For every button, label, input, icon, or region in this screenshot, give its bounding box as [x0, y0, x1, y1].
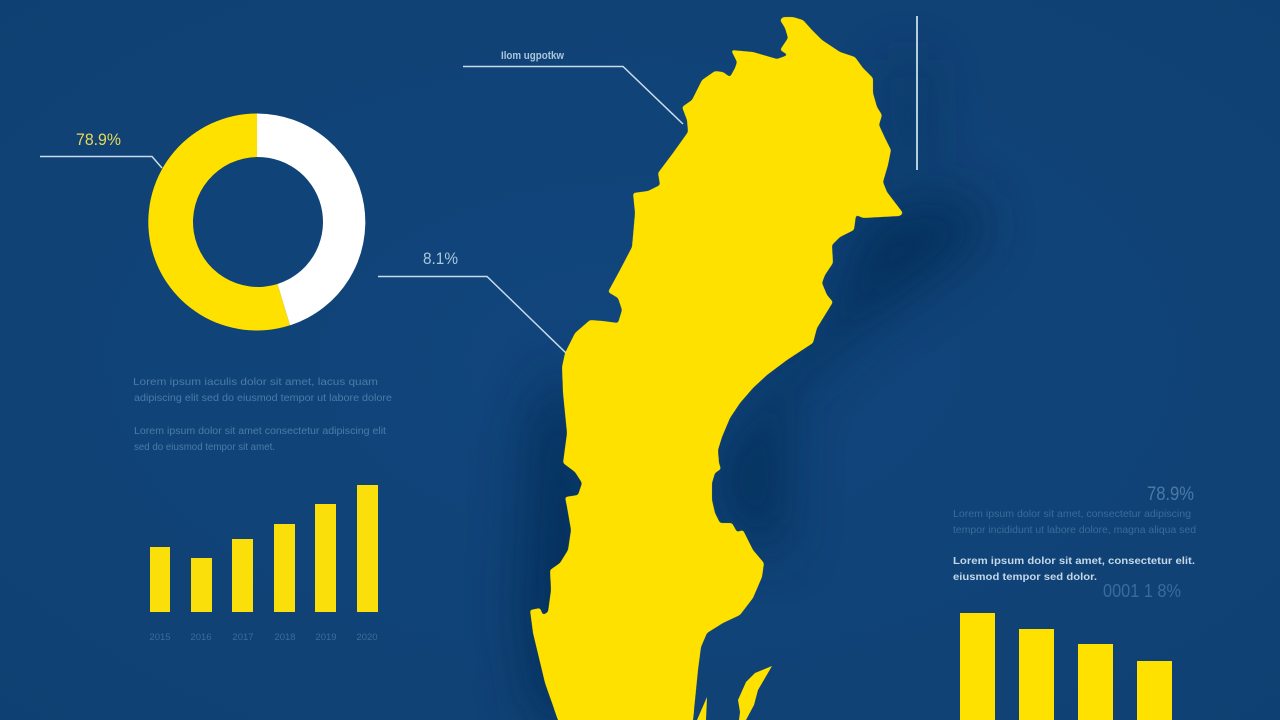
right bar chart [960, 613, 1172, 720]
left bar chart [149, 485, 378, 643]
bar axis labels: 2020 [356, 632, 378, 643]
right bright text block [953, 555, 1195, 583]
bar axis labels: 2018 [274, 632, 296, 643]
mainland silhouette [530, 17, 903, 720]
bar axis labels [149, 632, 378, 643]
left text block [133, 376, 392, 453]
left text block: Lorem ipsum iaculis dolor sit amet, lacus quam [133, 376, 378, 388]
right figure label: 0001 1 8% [1103, 581, 1181, 601]
map of Sweden [530, 17, 903, 720]
right dim text block [953, 508, 1196, 536]
donut chart [148, 113, 365, 330]
callout: donut percentage [40, 130, 162, 168]
callout: donut percentage: 78.9% [76, 130, 121, 149]
donut segment: yellow [148, 113, 290, 330]
right percentage heading: 78.9% [1147, 484, 1194, 505]
bar axis labels: 2019 [315, 632, 337, 643]
left text block: Lorem ipsum dolor sit amet consectetur adipiscing elit [134, 425, 386, 437]
map shadow [520, 60, 985, 720]
bars [150, 485, 378, 612]
vertical marker line [916, 16, 918, 170]
bar axis labels: 2017 [232, 632, 254, 643]
callout: middle map label: 8.1% [423, 249, 458, 268]
right bright text block: Lorem ipsum dolor sit amet, consectetur elit. [953, 555, 1195, 567]
right dim text block: tempor incididunt ut labore dolore, magna aliqua sed [953, 524, 1196, 536]
bar axis labels: 2016 [190, 632, 212, 643]
right bright text block: eiusmod tempor sed dolor. [953, 571, 1097, 583]
donut segment: white [257, 114, 365, 325]
callout: middle map label [378, 249, 566, 353]
bar axis labels: 2015 [149, 632, 171, 643]
left text block: sed do eiusmod tempor sit amet. [134, 441, 275, 453]
island: Oland [697, 697, 707, 720]
callout: top map label: Ilom ugpotkw [501, 50, 564, 62]
mainland bottom edge [554, 710, 694, 720]
left text block: adipiscing elit sed do eiusmod tempor ut labore dolore [134, 392, 392, 404]
island: Gotland [738, 666, 772, 720]
callout: top map label [463, 50, 683, 124]
right dim text block: Lorem ipsum dolor sit amet, consectetur adipiscing [953, 508, 1191, 520]
